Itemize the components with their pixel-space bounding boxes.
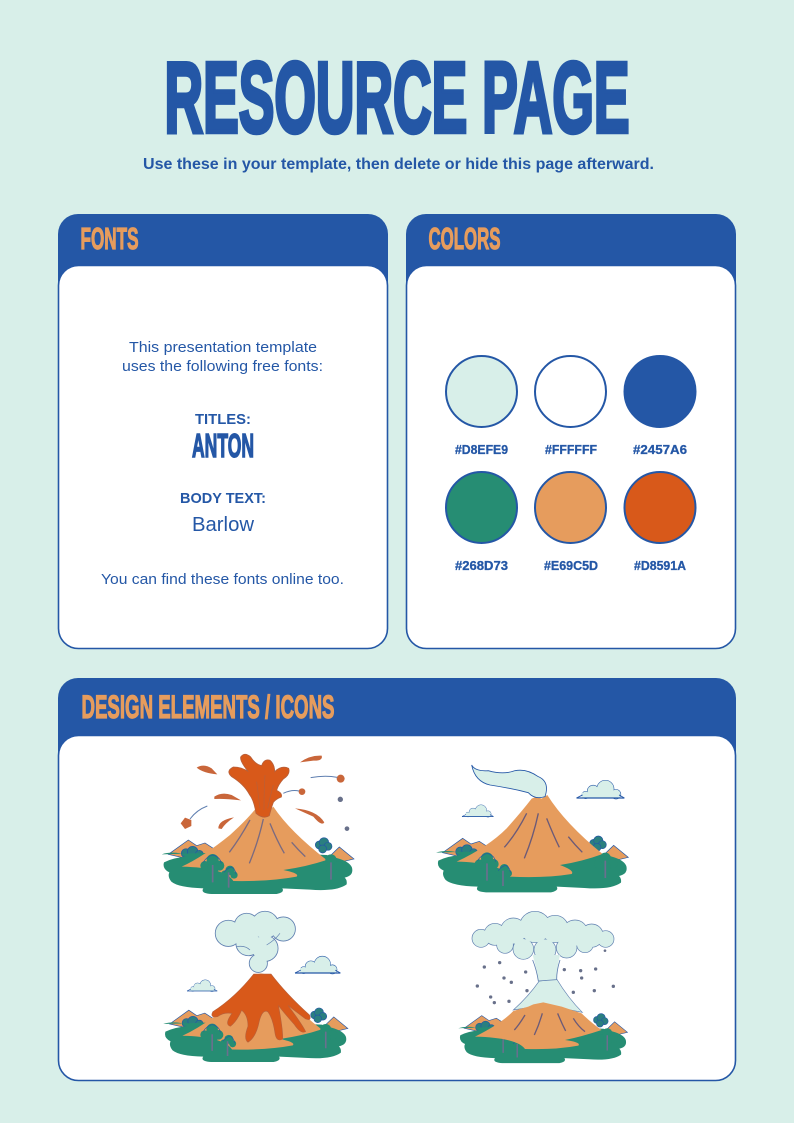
hex labels: #E69C5D — [544, 559, 598, 573]
text: barlow sample: Barlow — [192, 514, 255, 536]
panel: fonts — [58, 214, 388, 648]
swatch: white — [535, 356, 606, 427]
panel header: colors — [406, 214, 736, 304]
icon: erupting volcano with lava — [162, 754, 354, 894]
swatch: light mint — [446, 356, 517, 427]
heading: fonts: FONTS — [80, 221, 138, 256]
icon: smoking volcano — [436, 765, 628, 892]
icon: cloud large, smoking volcano — [576, 781, 624, 799]
swatch: green — [446, 472, 517, 543]
text: footer note: You can find these fonts online too. — [101, 571, 344, 588]
text: body label: BODY TEXT: — [180, 490, 266, 507]
panel body: design elements — [58, 736, 736, 1080]
icon: cloud small, lava volcano — [187, 980, 217, 991]
hex labels: #268D73 — [455, 559, 508, 573]
heading: design elements: DESIGN ELEMENTS / ICONS — [82, 689, 334, 725]
panel body: fonts — [58, 266, 388, 648]
icon: cloud small, smoking volcano — [462, 805, 494, 817]
panel header: fonts — [58, 214, 388, 304]
hex labels: #2457A6 — [633, 443, 687, 457]
text: intro — [122, 339, 323, 375]
hex labels — [455, 443, 687, 573]
icon: volcano with ash cloud — [458, 912, 627, 1063]
hex labels: #D8591A — [634, 559, 686, 573]
panel: colors — [406, 214, 736, 648]
text: titles label: TITLES: — [195, 411, 251, 428]
text: intro: This presentation template — [129, 339, 317, 356]
panel header: design elements — [58, 678, 736, 778]
swatch: orange — [624, 472, 696, 543]
subtitle: Use these in your template, then delete or hide this page afterward. — [143, 156, 654, 173]
icon: cloud large, lava volcano — [295, 956, 340, 974]
icon: volcano with lava flow — [163, 912, 348, 1062]
heading: colors: COLORS — [428, 221, 500, 256]
hex labels: #D8EFE9 — [455, 443, 508, 457]
swatch: blue — [624, 356, 696, 427]
text: anton sample: ANTON — [192, 427, 254, 464]
swatch: tan — [535, 472, 606, 543]
panel: design elements — [58, 678, 736, 1080]
text: intro: uses the following free fonts: — [122, 358, 323, 375]
panel body: colors — [406, 266, 736, 648]
hex labels: #FFFFFF — [545, 443, 597, 457]
